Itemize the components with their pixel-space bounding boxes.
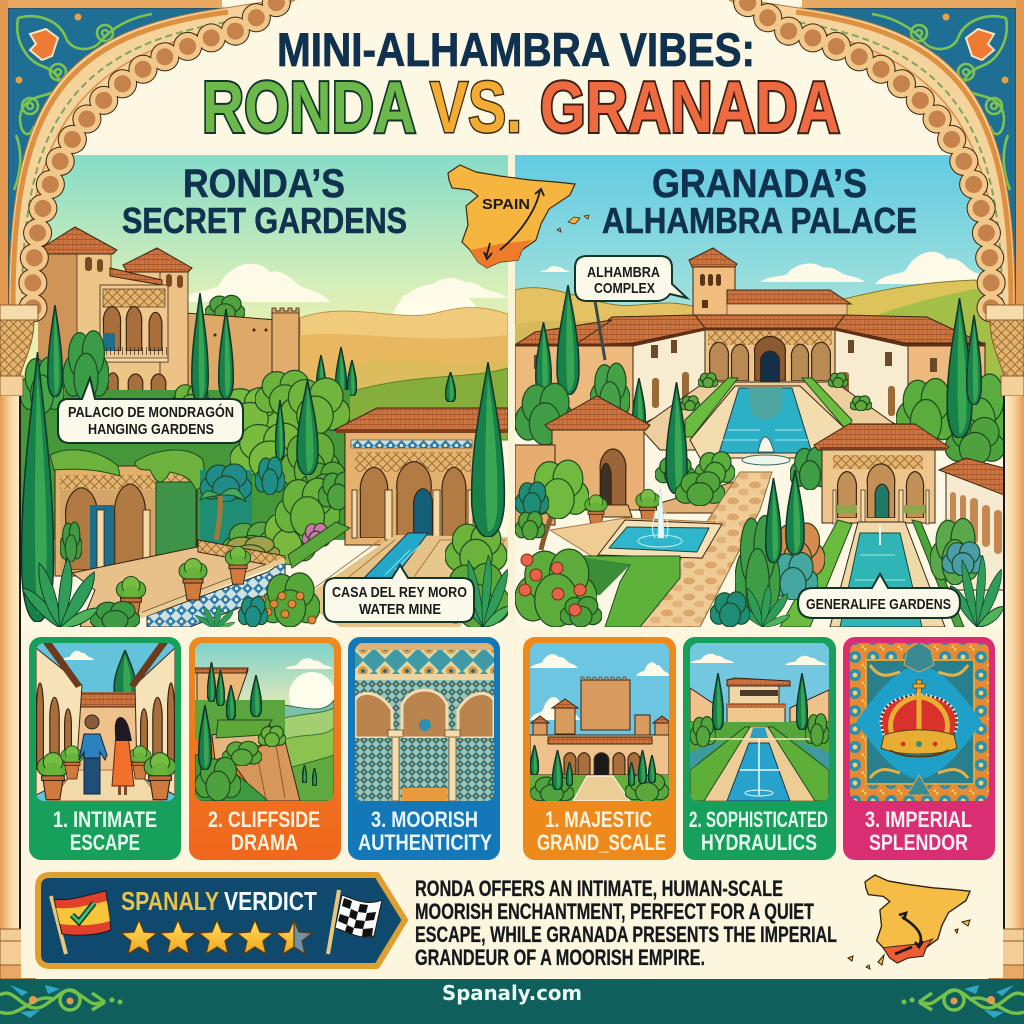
verdict heading: SPANALY: [121, 886, 219, 916]
cypress and tree beside gazebo: [515, 382, 687, 550]
cypress right: [472, 362, 504, 537]
map: Spain top: [448, 165, 589, 268]
map: Spain with route: [848, 875, 970, 969]
label: GRAND_SCALE: [537, 830, 666, 855]
main reflecting pool: [690, 386, 855, 465]
clouds: [180, 264, 508, 302]
label: [358, 807, 492, 855]
tall cypresses rear: [536, 285, 645, 434]
palm and shrubs: [200, 457, 358, 565]
heading: Granada's Alhambra Palace: GRANADA’S: [652, 162, 867, 206]
green tree behind wall: [205, 294, 245, 317]
rating stars: [121, 920, 312, 954]
upper shrub planter: [660, 472, 740, 513]
tall cypress left: [22, 352, 53, 622]
rolling hills: [515, 280, 1004, 381]
card: Majestic Grand Scale: [523, 637, 676, 860]
verdict text: [415, 876, 837, 970]
card: Intimate Escape: [29, 637, 181, 860]
title: [202, 23, 840, 148]
footer site name: Spanaly.com: [442, 981, 582, 1005]
woman: [112, 717, 134, 795]
illustration: couple in courtyard: [36, 643, 176, 801]
potted plants: [116, 546, 251, 620]
hedges along main pool: [685, 378, 852, 437]
label: [208, 807, 320, 855]
gap between panels: [508, 155, 515, 627]
label: 3. MOORISH: [371, 807, 478, 832]
illustration: cliffside: [195, 643, 335, 801]
heading: Ronda's Secret Gardens: SECRET GARDENS: [122, 200, 407, 241]
title: GRANADA: [540, 68, 840, 148]
mid cypresses: [48, 293, 318, 475]
arch frame: right corner: [729, 0, 1024, 308]
callout: Generalife Gardens: [798, 574, 960, 618]
sun: [393, 284, 476, 316]
bottom reflecting pool and hedges: [780, 520, 964, 627]
palace towers: [38, 227, 192, 405]
callout: Casa del Rey Moro: [324, 565, 474, 622]
pool and paved courtyard: [288, 522, 508, 627]
vine pavilion: [50, 450, 204, 582]
tower and upper wing: [688, 247, 852, 315]
trees on both sides: [515, 298, 1010, 490]
verdict heading: [121, 886, 317, 916]
callout: Alhambra Complex: ALHAMBRA: [587, 264, 660, 281]
palace roofs: [515, 315, 985, 345]
man: [79, 715, 107, 794]
panel: Ronda scene: [20, 155, 510, 630]
panel: Granada scene: [515, 155, 1010, 627]
label: [689, 807, 828, 855]
label: 3. IMPERIAL: [865, 807, 972, 832]
footer ornament: left: [0, 985, 122, 1018]
label: DRAMA: [231, 830, 298, 855]
palace wings: [515, 328, 985, 430]
orange flower: [30, 29, 58, 60]
far right arcade: [939, 458, 1004, 590]
lower cream band: [21, 628, 1003, 978]
pavilion with pool: [334, 408, 508, 545]
scalloped intrados: [33, 0, 285, 308]
icon: Spanish flag with check: [51, 891, 111, 954]
heading: Ronda's Secret Gardens: [122, 162, 407, 241]
card: Cliffside Drama: [189, 637, 341, 860]
distant cypresses: [316, 347, 456, 402]
label: AUTHENTICITY: [358, 830, 492, 855]
left gazebo: [515, 396, 650, 525]
verdict text: GRANDEUR OF A MOORISH EMPIRE.: [415, 945, 705, 970]
flower beds and cypresses: [710, 470, 1004, 627]
label: HYDRAULICS: [701, 830, 817, 855]
title: RONDA: [202, 68, 416, 148]
right pavilion: [814, 424, 949, 524]
title: MINI-ALHAMBRA VIBES:: [277, 23, 755, 76]
label: 1. MAJESTIC: [545, 807, 652, 832]
spandrel: [8, 8, 226, 305]
callout: Casa del Rey Moro: WATER MINE: [359, 601, 441, 618]
label: [865, 807, 972, 855]
callout: Generalife Gardens: GENERALIFE GARDENS: [806, 596, 951, 613]
verdict text: ESCAPE, WHILE GRANADA PRESENTS THE IMPERIAL: [415, 922, 837, 947]
terrace with tiled wall: [72, 540, 285, 627]
footer band: [0, 979, 1024, 1024]
callout: Palacio de Mondragon: HANGING GARDENS: [88, 421, 214, 438]
label: 1. INTIMATE: [53, 807, 157, 832]
title: VS.: [430, 68, 522, 148]
heading: Granada's Alhambra Palace: [602, 162, 917, 241]
card: Moorish Authenticity: [348, 637, 500, 860]
column: left: [0, 305, 38, 979]
verdict text: RONDA OFFERS AN INTIMATE, HUMAN-SCALE: [415, 876, 783, 901]
illustration: water channel: [684, 643, 834, 801]
illustration: moorish arches: [355, 643, 494, 801]
icon: crown: [881, 680, 957, 757]
garden rear terraces: [640, 373, 900, 450]
spandrel scrollwork: [14, 14, 152, 190]
callout: Alhambra Complex: COMPLEX: [594, 280, 655, 297]
arch band: [9, 0, 295, 305]
band stripes: [13, 12, 236, 305]
column: right: [986, 305, 1024, 979]
illustration: crown on tapestry: [850, 642, 989, 801]
heading: Granada's Alhambra Palace: ALHAMBRA PALACE: [602, 200, 917, 241]
label: [53, 807, 157, 855]
label: 2. SOPHISTICATED: [689, 807, 828, 832]
clouds: [540, 252, 995, 284]
arch frame: left corner: [0, 0, 295, 308]
lower left hedge and flower bush: [515, 549, 680, 627]
label: 2. CLIFFSIDE: [208, 807, 320, 832]
callout: Alhambra Complex: [575, 256, 687, 360]
callout: Palacio de Mondragon: [58, 378, 243, 443]
label: SPLENDOR: [869, 830, 968, 855]
verdict banner: [38, 875, 405, 966]
callout: Casa del Rey Moro: CASA DEL REY MORO: [332, 584, 467, 601]
callout: Palacio de Mondragon: PALACIO DE MONDRAGÓN: [68, 403, 234, 421]
top border: [0, 0, 222, 8]
central green mass: [20, 331, 350, 540]
label: ESCAPE: [70, 830, 140, 855]
map: Spain top: SPAIN: [482, 196, 530, 213]
verdict heading: VERDICT: [224, 886, 317, 916]
heading: Ronda's Secret Gardens: RONDA’S: [183, 162, 345, 206]
illustration: fortress: [530, 643, 671, 803]
foreground foliage: [22, 523, 510, 630]
castle wall: [188, 308, 300, 390]
rolling hills: [300, 308, 508, 440]
square fountain pool: [598, 487, 722, 558]
label: [537, 807, 666, 855]
icon: checkered flag: [328, 890, 382, 954]
stone paths: [550, 472, 772, 627]
card: Sophisticated Hydraulics: [683, 637, 836, 860]
verdict text: MOORISH ENCHANTMENT, PERFECT FOR A QUIET: [415, 899, 814, 924]
card: Imperial Splendor: [843, 637, 995, 860]
footer ornament: right: [902, 985, 1024, 1018]
